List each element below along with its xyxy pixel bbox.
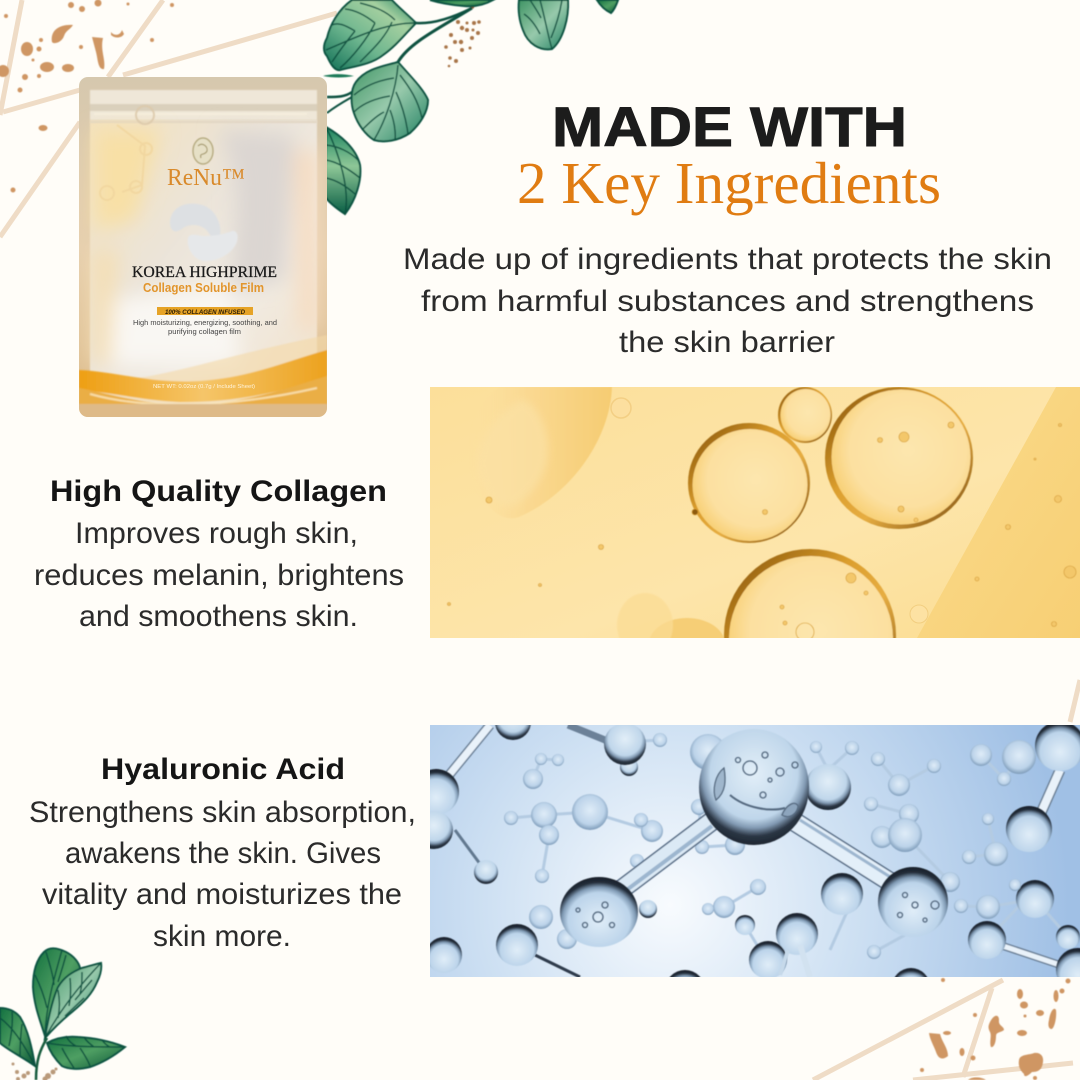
lower droplets: [617, 593, 724, 638]
panel: collagen image: [430, 387, 1080, 638]
decorative lines bottom right: [813, 680, 1080, 1080]
intro text: [403, 243, 1052, 359]
pouch description: [134, 320, 276, 336]
collagen text: Improves rough skin,: [75, 517, 358, 550]
hyaluronic text: awakens the skin. Gives: [65, 837, 381, 870]
background molecules: [473, 732, 1080, 977]
side bubbles: [611, 398, 928, 623]
main molecule spheres: [560, 729, 948, 947]
pouch molecule outline: [100, 106, 154, 200]
panel: hyaluronic acid image: [430, 725, 1080, 977]
hyaluronic text: skin more.: [153, 920, 291, 953]
intro text: the skin barrier: [619, 326, 835, 359]
decorative splatter top left: [0, 0, 174, 192]
icon: leaf branch top: [323, 0, 618, 214]
title: 2 Key Ingredients: [517, 150, 941, 216]
decorative splatter bottom left: [12, 1062, 58, 1080]
pouch banner: 100% COLLAGEN INFUSED: [165, 310, 246, 316]
collagen text: and smoothens skin.: [79, 600, 358, 633]
foreground rods: [445, 725, 1060, 977]
pouch description: purifying collagen film: [168, 327, 241, 336]
hyaluronic text: [29, 796, 416, 953]
oil bubbles: [687, 387, 974, 638]
collagen heading: High Quality Collagen: [50, 475, 387, 508]
decorative splatter bottom right: [920, 978, 1070, 1080]
foreground molecules: [430, 725, 1080, 977]
pouch title: KOREA HIGHPRIME: [132, 264, 277, 281]
sphere bubbles: [576, 752, 939, 928]
hyaluronic heading: Hyaluronic Acid: [101, 753, 345, 786]
decorative gold lines top left: [0, 0, 337, 237]
collagen text: [34, 517, 404, 633]
pouch net weight: NET WT: 0.02oz (0.7g / Include Sheet): [153, 384, 255, 390]
intro text: from harmful substances and strengthens: [421, 285, 1034, 318]
pouch eye patches: [170, 204, 238, 261]
pouch description: High moisturizing, energizing, soothing, and: [133, 318, 277, 327]
hyaluronic text: Strengthens skin absorption,: [29, 796, 416, 829]
intro text: Made up of ingredients that protects the skin: [403, 243, 1052, 276]
oil sheet wedge: [917, 387, 1080, 638]
tiny bubbles: [448, 422, 1076, 641]
icon: leaf plant bottom left: [0, 948, 125, 1080]
hyaluronic text: vitality and moisturizes the: [42, 878, 402, 911]
collagen text: reduces melanin, brightens: [34, 559, 404, 592]
title: [517, 95, 941, 216]
pouch highlight folds: [92, 130, 317, 365]
pouch crest logo: [193, 138, 213, 164]
background molecule rods: [455, 740, 1068, 952]
decorative seed cluster: [444, 20, 481, 67]
pouch brand: ReNu™: [167, 165, 245, 191]
product: collagen film pouch: [79, 77, 327, 417]
pouch banner: [157, 307, 253, 315]
pouch top seal strip: [90, 90, 317, 122]
pouch subtitle: Collagen Soluble Film: [143, 281, 264, 295]
title: MADE WITH: [552, 95, 907, 158]
large faded droplet: [504, 387, 612, 518]
pouch gold waves: [79, 335, 327, 417]
